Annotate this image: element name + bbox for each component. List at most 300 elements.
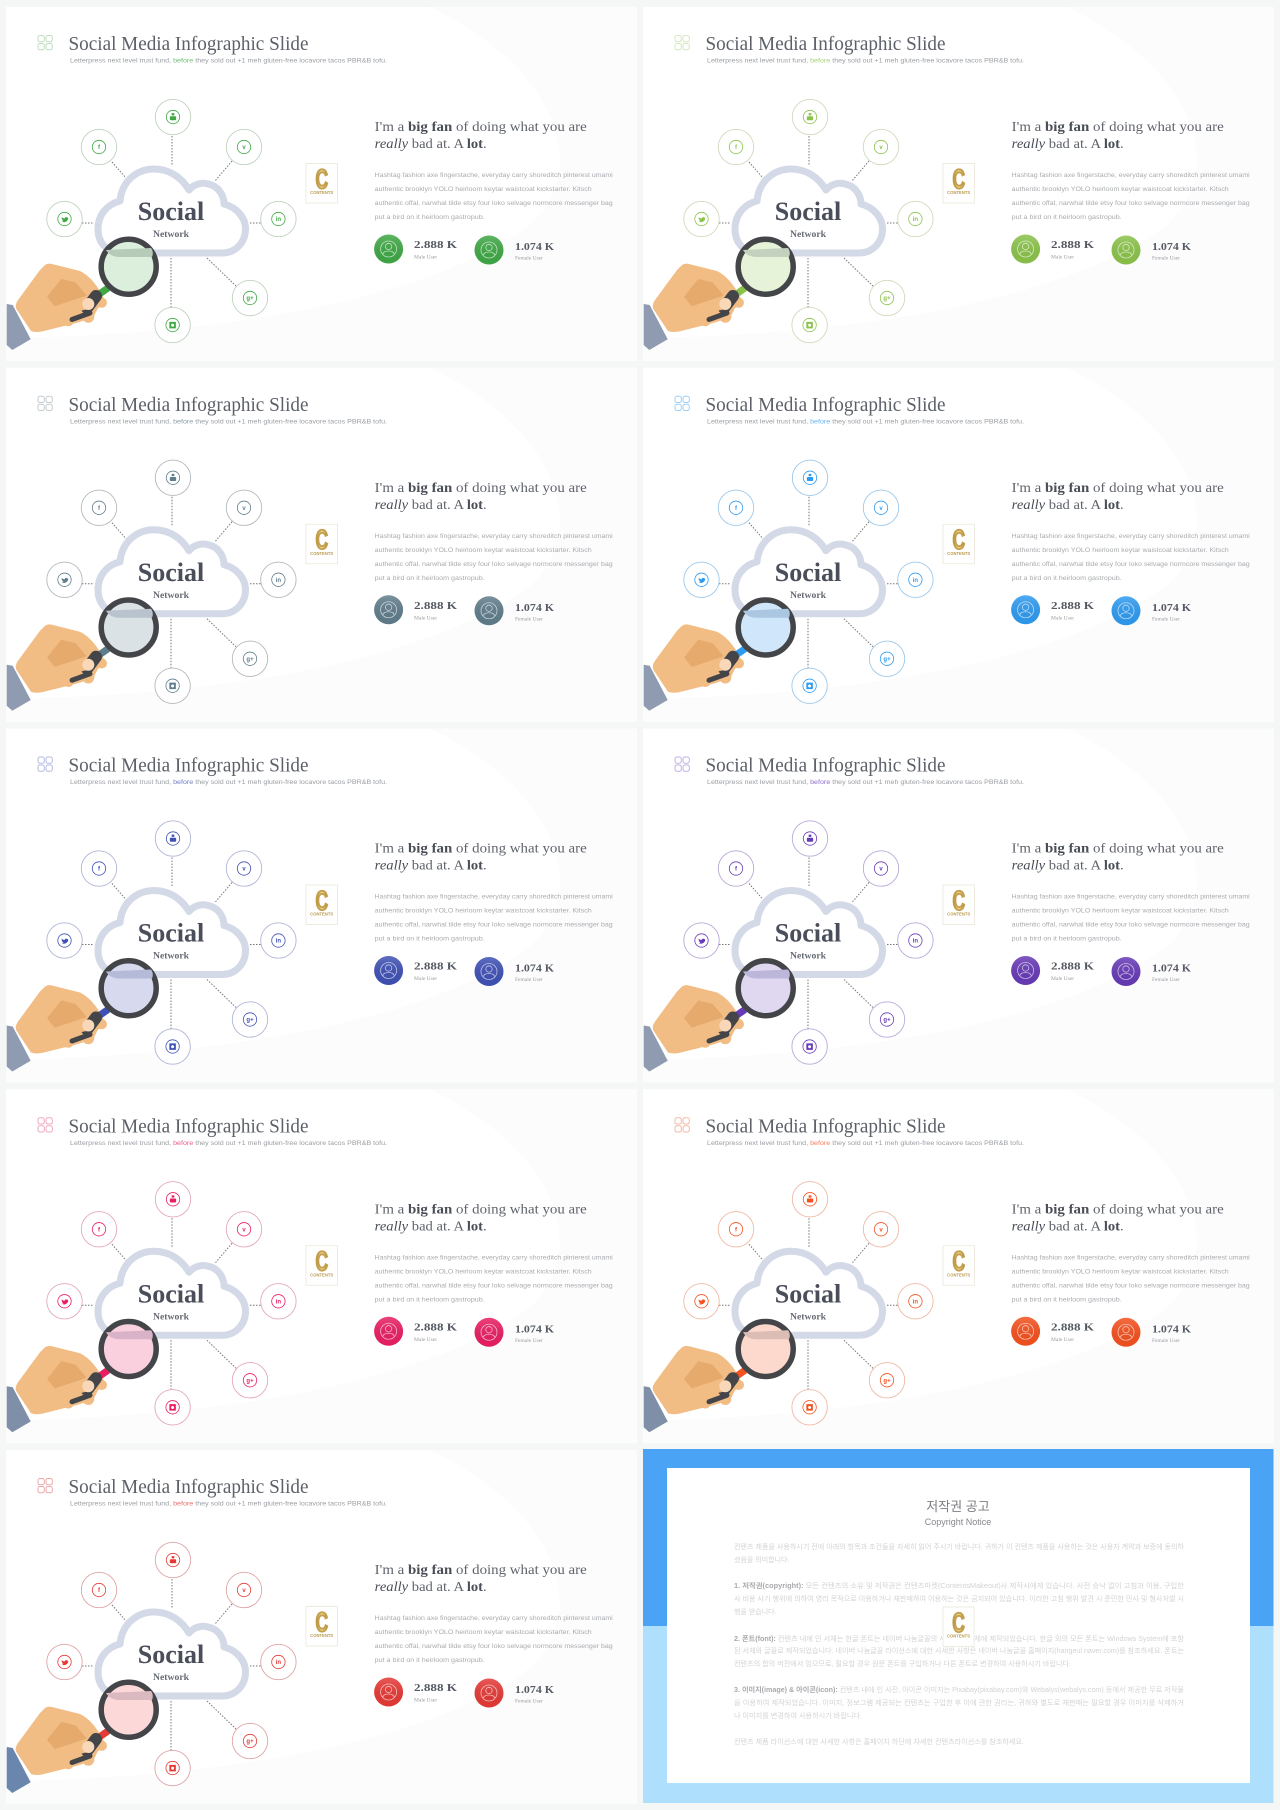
notice body: [734, 1542, 1185, 1746]
node: google plus: g+: [883, 657, 891, 663]
stat: male users: Male User: [1051, 1337, 1074, 1343]
node: twitter: [47, 1644, 82, 1680]
cloud label: Social: Social: [775, 197, 841, 226]
icon: title grid: [38, 396, 52, 411]
node: instagram: [155, 1390, 190, 1425]
hand with magnifier: [7, 1321, 156, 1432]
dotted connectors: [82, 1579, 261, 1750]
heading: I'm a big fan of doing what you are: [375, 481, 587, 496]
logo: contents: CONTENTS: [947, 912, 970, 916]
body text: put a bird on it heirloom gastropub.: [1012, 575, 1122, 582]
node: facebook: [81, 1572, 117, 1608]
heading: [1012, 842, 1224, 874]
stat: female users: [474, 1678, 554, 1708]
node: vimeo: [226, 851, 262, 886]
subtitle: Letterpress next level trust fund, before they sold out +1 meh gluten-free locavore tacos PBR&B tofu.: [707, 418, 1024, 425]
node: twitter: [47, 562, 82, 597]
heading: really bad at. A lot.: [375, 1219, 487, 1234]
cloud label: Network: Network: [790, 1312, 827, 1322]
heading: I'm a big fan of doing what you are: [375, 842, 587, 856]
dotted connectors: [719, 858, 898, 1028]
cloud label: Network: Network: [153, 1312, 190, 1322]
stat: female users: Female User: [1152, 977, 1180, 983]
stat: male users: 2.888 K: [1051, 960, 1095, 972]
cloud label: Network: Network: [790, 591, 827, 601]
heading: [1012, 481, 1224, 513]
icon: title grid: [38, 1478, 52, 1493]
heading: I'm a big fan of doing what you are: [375, 1563, 587, 1578]
stat: male users: 2.888 K: [414, 239, 458, 251]
body text: put a bird on it heirloom gastropub.: [375, 1657, 485, 1664]
body text: authentic brooklyn YOLO heirloom keytar waistcoat kickstarter. Kitsch: [375, 1268, 592, 1275]
node: twitter: [684, 562, 719, 597]
logo: contents: C: [315, 885, 328, 916]
node: instagram: [155, 668, 190, 703]
node: linkedin: [261, 201, 296, 237]
title: Social Media Infographic Slide: [706, 394, 946, 416]
body text: Hashtag fashion axe fingerstache, everyday carry shoreditch pinterest umami: [1012, 533, 1250, 540]
stat: female users: Female User: [1152, 256, 1180, 262]
stat: female users: Female User: [1152, 1338, 1180, 1344]
node: vimeo: [226, 1572, 262, 1608]
stat: female users: [474, 957, 554, 986]
dotted connectors: [82, 1218, 261, 1389]
node: vimeo: [863, 129, 899, 165]
cloud label: Social: Social: [775, 558, 841, 587]
cloud: [98, 890, 246, 974]
logo: contents: CONTENTS: [947, 190, 970, 195]
cloud label: Social: Social: [138, 918, 204, 948]
body text: [375, 894, 613, 942]
node: linkedin: [261, 1644, 296, 1680]
node: google plus: [869, 1363, 905, 1398]
body text: Hashtag fashion axe fingerstache, everyday carry shoreditch pinterest umami: [375, 894, 613, 900]
node: facebook: f: [98, 1227, 101, 1233]
node: facebook: [718, 1212, 754, 1247]
node: vimeo: v: [879, 867, 883, 873]
hand with magnifier: [644, 600, 793, 711]
node: facebook: f: [98, 145, 101, 151]
cloud label: Social: Social: [138, 197, 204, 226]
logo: contents: CONTENTS: [947, 1272, 970, 1277]
subtitle: Letterpress next level trust fund, before they sold out +1 meh gluten-free locavore tacos PBR&B tofu.: [707, 58, 1024, 64]
node: linkedin: in: [276, 217, 281, 223]
heading: really bad at. A lot.: [375, 858, 487, 874]
subtitle: Letterpress next level trust fund, before they sold out +1 meh gluten-free locavore tacos PBR&B tofu.: [707, 779, 1024, 786]
hand with magnifier: [7, 961, 156, 1072]
node: vimeo: [226, 129, 262, 165]
icon: title grid: [675, 757, 689, 771]
title: Social Media Infographic Slide: [68, 1476, 309, 1498]
body text: authentic brooklyn YOLO heirloom keytar waistcoat kickstarter. Kitsch: [1012, 186, 1229, 193]
node: youtube: [155, 460, 191, 495]
heading: [375, 481, 587, 513]
node: google plus: [232, 1002, 268, 1037]
node: linkedin: in: [276, 939, 281, 945]
logo: contents: C: [952, 163, 965, 195]
node: vimeo: v: [879, 1227, 883, 1233]
cloud label: Social: Social: [138, 1640, 204, 1669]
heading: I'm a big fan of doing what you are: [1012, 120, 1224, 135]
title: Social Media Infographic Slide: [706, 754, 946, 776]
stat: male users: 2.888 K: [414, 1321, 458, 1333]
subtitle: Letterpress next level trust fund, before they sold out +1 meh gluten-free locavore tacos PBR&B tofu.: [70, 418, 387, 425]
node: instagram: [155, 307, 190, 343]
hand with magnifier: [7, 239, 156, 350]
stat: female users: 1.074 K: [1152, 241, 1191, 253]
heading: I'm a big fan of doing what you are: [1012, 1202, 1224, 1217]
node: linkedin: in: [913, 1299, 918, 1305]
node: instagram: [792, 307, 827, 343]
stat: male users: Male User: [414, 254, 437, 260]
node: linkedin: in: [913, 939, 918, 945]
logo: contents: C: [315, 524, 328, 555]
stat: male users: Male User: [1051, 976, 1074, 982]
notice subtitle: Copyright Notice: [925, 1517, 991, 1527]
body text: [1012, 1254, 1250, 1303]
stat: male users: [374, 956, 458, 985]
heading: really bad at. A lot.: [1012, 137, 1124, 152]
stat: female users: [474, 596, 554, 625]
notice body: 나 이미지를 변경하여 사용하시기 바랍니다.: [734, 1711, 862, 1720]
node: vimeo: v: [242, 145, 246, 151]
node: google plus: g+: [246, 296, 254, 302]
stat: male users: [374, 595, 458, 624]
node: google plus: g+: [246, 1378, 254, 1384]
body text: authentic brooklyn YOLO heirloom keytar waistcoat kickstarter. Kitsch: [375, 1629, 592, 1636]
body text: Hashtag fashion axe fingerstache, everyday carry shoreditch pinterest umami: [1012, 172, 1250, 179]
node: facebook: [718, 129, 754, 165]
node: facebook: f: [98, 506, 101, 512]
stat: male users: 2.888 K: [414, 600, 458, 612]
logo: contents: CONTENTS: [947, 1634, 970, 1638]
logo: contents: C: [952, 885, 965, 916]
logo: contents: C: [952, 524, 965, 555]
icon: title grid: [38, 757, 52, 771]
logo: contents: CONTENTS: [310, 551, 333, 556]
node: google plus: g+: [883, 296, 891, 302]
body text: Hashtag fashion axe fingerstache, everyday carry shoreditch pinterest umami: [375, 533, 613, 540]
notice body: 1. 저작권(copyright): 모든 컨텐츠의 소유 및 저작권은 컨텐츠마켓(ContentsMakeout)사 제작사에게 있습니다. 사전 승낙 없이 고침과 이용, 구입한: [734, 1581, 1185, 1590]
notice body: 사 비용 사기 행위에 의하여 영리 목적으로 이용하거나 재판매하여 이용하는 것은 금지되어 있습니다. 이러한 고침 행위 발견 시 준민한 민사 및 형사처벌 시: [734, 1594, 1184, 1603]
notice title: 저작권 공고: [926, 1499, 990, 1514]
logo: contents: CONTENTS: [310, 190, 333, 195]
logo: contents: C: [315, 1246, 328, 1277]
heading: [1012, 120, 1224, 152]
node: linkedin: [898, 201, 933, 237]
panel: copyright notice: [643, 1449, 1274, 1803]
node: linkedin: [261, 1284, 296, 1319]
body text: Hashtag fashion axe fingerstache, everyday carry shoreditch pinterest umami: [375, 172, 613, 179]
node: google plus: g+: [246, 657, 254, 663]
stat: male users: 2.888 K: [1051, 239, 1095, 251]
body text: authentic offal, narwhal tilde etsy four loko selvage normcore messenger bag: [1012, 561, 1250, 568]
node: facebook: f: [735, 867, 738, 873]
node: instagram: [792, 1029, 827, 1064]
body text: [1012, 172, 1250, 221]
stat: female users: 1.074 K: [515, 602, 554, 614]
cloud label: Social: Social: [775, 918, 841, 948]
node: facebook: [718, 851, 754, 886]
stat: female users: [1112, 957, 1191, 986]
node: vimeo: v: [879, 145, 883, 151]
stat: male users: Male User: [1051, 254, 1074, 260]
stat: male users: [1011, 1317, 1095, 1346]
stat: male users: Male User: [414, 615, 437, 621]
icon: title grid: [675, 1118, 689, 1132]
body text: authentic offal, narwhal tilde etsy four loko selvage normcore messenger bag: [1012, 200, 1250, 207]
node: twitter: [47, 923, 82, 958]
cloud: [735, 1251, 882, 1335]
body text: [375, 533, 613, 582]
stat: female users: [1112, 236, 1191, 264]
body text: authentic brooklyn YOLO heirloom keytar waistcoat kickstarter. Kitsch: [375, 547, 592, 554]
panel: green slide: [6, 7, 637, 361]
stat: female users: 1.074 K: [515, 241, 554, 253]
subtitle: Letterpress next level trust fund, before they sold out +1 meh gluten-free locavore tacos PBR&B tofu.: [70, 58, 387, 64]
node: linkedin: in: [276, 1660, 281, 1666]
heading: I'm a big fan of doing what you are: [375, 1202, 587, 1217]
logo: contents: [943, 163, 974, 203]
node: google plus: g+: [883, 1378, 891, 1384]
logo: contents: [306, 163, 338, 203]
panel: purple slide: [643, 728, 1274, 1082]
stat: female users: Female User: [1152, 616, 1180, 622]
node: facebook: [718, 490, 754, 525]
stat: male users: Male User: [414, 1337, 437, 1343]
icon: title grid: [38, 1118, 52, 1132]
logo: contents: [306, 1606, 338, 1646]
notice body: 된 서체와 글꼴로 제작되었습니다. 네이버 나눔글꼴 라이선스에 대한 사세한 사항은 네이버 나눔글꼴 홈페이지(hangeul.naver.com)를 참조하세요. 폰트는: [734, 1646, 1185, 1655]
body text: authentic offal, narwhal tilde etsy four loko selvage normcore messenger bag: [1012, 922, 1250, 928]
hand with magnifier: [644, 239, 793, 350]
logo: contents: CONTENTS: [310, 1633, 333, 1638]
body text: Hashtag fashion axe fingerstache, everyday carry shoreditch pinterest umami: [375, 1254, 613, 1261]
node: google plus: g+: [246, 1018, 254, 1024]
stat: male users: 2.888 K: [1051, 1321, 1095, 1333]
heading: [375, 1202, 587, 1234]
node: youtube: [155, 1182, 191, 1217]
subtitle: Letterpress next level trust fund, before they sold out +1 meh gluten-free locavore tacos PBR&B tofu.: [70, 779, 387, 786]
heading: really bad at. A lot.: [1012, 498, 1124, 513]
cloud label: Social: Social: [775, 1279, 841, 1308]
stat: male users: 2.888 K: [414, 960, 458, 972]
notice body: 2. 폰트(font): 컨텐츠 내에 인 서체는 한글 폰트는 네이버 나눔글꼴의 서체와 웹서체에 제작되었습니다. 한글 외의 모든 폰트는 Windows System에 포함: [734, 1634, 1185, 1643]
cloud label: Network: Network: [790, 952, 827, 962]
stat: male users: Male User: [414, 976, 437, 982]
body text: [375, 172, 613, 221]
node: linkedin: in: [276, 1299, 281, 1305]
cloud: [98, 1251, 246, 1335]
dotted connectors: [719, 136, 898, 307]
body text: [1012, 533, 1250, 582]
body text: authentic brooklyn YOLO heirloom keytar waistcoat kickstarter. Kitsch: [1012, 1268, 1229, 1275]
heading: really bad at. A lot.: [375, 137, 487, 152]
heading: [375, 1563, 587, 1595]
cloud label: Network: Network: [153, 1673, 190, 1683]
stat: male users: [374, 1317, 458, 1346]
node: vimeo: v: [242, 1588, 246, 1594]
heading: [375, 842, 587, 874]
node: facebook: [81, 851, 117, 886]
subtitle: Letterpress next level trust fund, before they sold out +1 meh gluten-free locavore tacos PBR&B tofu.: [707, 1140, 1024, 1147]
logo: contents: [306, 885, 338, 924]
dotted connectors: [82, 858, 261, 1028]
heading: I'm a big fan of doing what you are: [375, 120, 587, 135]
node: vimeo: [863, 1212, 899, 1247]
dotted connectors: [82, 136, 261, 307]
body text: authentic brooklyn YOLO heirloom keytar waistcoat kickstarter. Kitsch: [375, 908, 592, 914]
icon: title grid: [675, 396, 689, 411]
node: linkedin: in: [913, 217, 918, 223]
stat: female users: Female User: [515, 1698, 543, 1704]
body text: authentic offal, narwhal tilde etsy four loko selvage normcore messenger bag: [375, 200, 613, 207]
cloud label: Social: Social: [138, 1279, 204, 1308]
body text: authentic brooklyn YOLO heirloom keytar waistcoat kickstarter. Kitsch: [1012, 547, 1229, 554]
heading: I'm a big fan of doing what you are: [1012, 842, 1224, 856]
node: facebook: f: [735, 1227, 738, 1233]
logo: contents: CONTENTS: [310, 912, 333, 916]
body text: Hashtag fashion axe fingerstache, everyday carry shoreditch pinterest umami: [375, 1615, 613, 1622]
node: twitter: [47, 201, 82, 237]
heading: [375, 120, 587, 152]
heading: really bad at. A lot.: [1012, 1219, 1124, 1234]
node: twitter: [47, 1284, 82, 1319]
node: google plus: [232, 641, 268, 676]
notice body: 컨텐츠 제품을 사용하시기 전에 아래의 항목과 조건들을 자세히 읽어 주시기 바랍니다. 귀하가 이 컨텐츠 제품을 사용하는 것은 사용자 계약과 보증에 동의하: [734, 1542, 1185, 1551]
dotted connectors: [719, 1218, 898, 1389]
stat: female users: Female User: [515, 616, 543, 622]
subtitle: Letterpress next level trust fund, before they sold out +1 meh gluten-free locavore tacos PBR&B tofu.: [70, 1500, 387, 1508]
cloud: [735, 890, 882, 974]
logo: contents: CONTENTS: [947, 551, 970, 556]
node: youtube: [792, 99, 828, 135]
cloud: [735, 169, 882, 253]
heading: really bad at. A lot.: [375, 1580, 487, 1595]
body text: put a bird on it heirloom gastropub.: [375, 936, 485, 942]
body text: put a bird on it heirloom gastropub.: [1012, 936, 1122, 942]
cloud label: Network: Network: [790, 230, 827, 240]
logo: contents: [943, 524, 974, 564]
node: vimeo: v: [242, 1227, 246, 1233]
node: youtube: [792, 1182, 828, 1217]
dotted connectors: [719, 497, 898, 668]
node: twitter: [684, 923, 719, 958]
node: google plus: [869, 641, 905, 676]
body text: authentic brooklyn YOLO heirloom keytar waistcoat kickstarter. Kitsch: [375, 186, 592, 193]
title: Social Media Infographic Slide: [68, 33, 309, 55]
logo: contents: [943, 885, 974, 924]
stat: female users: 1.074 K: [1152, 1323, 1191, 1335]
cloud: [98, 1612, 246, 1696]
icon: title grid: [38, 36, 52, 50]
body text: authentic offal, narwhal tilde etsy four loko selvage normcore messenger bag: [375, 1282, 613, 1289]
hand with magnifier: [644, 1321, 793, 1432]
stat: male users: [1011, 234, 1095, 264]
node: facebook: f: [735, 506, 738, 512]
stat: female users: [1112, 596, 1191, 625]
cloud label: Network: Network: [153, 591, 190, 601]
node: instagram: [792, 1390, 827, 1425]
body text: [375, 1615, 613, 1664]
node: vimeo: [226, 1212, 262, 1247]
stat: male users: 2.888 K: [414, 1682, 458, 1694]
logo: contents: [943, 1607, 974, 1646]
title: Social Media Infographic Slide: [68, 754, 309, 776]
stat: female users: 1.074 K: [515, 1684, 554, 1696]
logo: contents: C: [315, 1606, 328, 1638]
body text: authentic offal, narwhal tilde etsy four loko selvage normcore messenger bag: [375, 1643, 613, 1650]
logo: contents: [306, 524, 338, 564]
body text: put a bird on it heirloom gastropub.: [375, 575, 485, 582]
body text: [375, 1254, 613, 1303]
stat: male users: Male User: [414, 1698, 437, 1704]
heading: really bad at. A lot.: [375, 498, 487, 513]
node: vimeo: v: [879, 506, 883, 512]
stat: female users: Female User: [515, 977, 543, 983]
body text: put a bird on it heirloom gastropub.: [375, 1296, 485, 1303]
heading: [1012, 1202, 1224, 1234]
body text: authentic offal, narwhal tilde etsy four loko selvage normcore messenger bag: [375, 561, 613, 568]
cloud: [98, 530, 246, 614]
dotted connectors: [82, 497, 261, 668]
node: facebook: [81, 129, 117, 165]
panel: indigo slide: [6, 728, 637, 1082]
cloud: [735, 530, 882, 614]
node: facebook: f: [98, 1588, 101, 1594]
panel: lime slide: [643, 7, 1274, 361]
node: linkedin: in: [913, 578, 918, 584]
stat: female users: 1.074 K: [1152, 602, 1191, 614]
logo: contents: [306, 1246, 338, 1285]
stat: female users: Female User: [515, 1338, 543, 1344]
node: vimeo: v: [242, 506, 246, 512]
body text: authentic brooklyn YOLO heirloom keytar waistcoat kickstarter. Kitsch: [1012, 908, 1229, 914]
node: linkedin: [898, 1284, 933, 1319]
node: linkedin: [898, 923, 933, 958]
stat: male users: [374, 1678, 458, 1706]
hand with magnifier: [7, 600, 156, 711]
notice body: 행을 받습니다.: [734, 1607, 777, 1616]
node: twitter: [684, 201, 719, 237]
node: vimeo: v: [242, 867, 246, 873]
cloud label: Network: Network: [153, 230, 190, 240]
node: google plus: [869, 280, 905, 316]
node: linkedin: [261, 562, 296, 597]
node: youtube: [792, 821, 828, 856]
hand with magnifier: [7, 1682, 156, 1793]
subtitle: Letterpress next level trust fund, before they sold out +1 meh gluten-free locavore tacos PBR&B tofu.: [70, 1140, 387, 1147]
body text: Hashtag fashion axe fingerstache, everyday carry shoreditch pinterest umami: [1012, 894, 1250, 900]
stat: male users: [374, 234, 458, 264]
body text: put a bird on it heirloom gastropub.: [1012, 214, 1122, 221]
node: google plus: [869, 1002, 905, 1037]
logo: contents: CONTENTS: [310, 1272, 333, 1277]
panel: slate slide: [6, 368, 637, 722]
cloud: [98, 169, 246, 253]
node: vimeo: [226, 490, 262, 525]
logo: contents: C: [952, 1246, 965, 1277]
stat: male users: [1011, 956, 1095, 985]
node: youtube: [155, 1542, 191, 1578]
notice body: 컨텐츠 제품 라이선스에 대한 사세한 사항은 홈페이지 하단에 자세한 컨텐츠라이선스를 참조하세요.: [734, 1737, 1024, 1746]
node: facebook: f: [98, 867, 101, 873]
panel: red slide: [6, 1450, 637, 1804]
title: Social Media Infographic Slide: [68, 1115, 309, 1137]
node: facebook: f: [735, 145, 738, 151]
logo: contents: C: [952, 1607, 965, 1638]
node: linkedin: [261, 923, 296, 958]
